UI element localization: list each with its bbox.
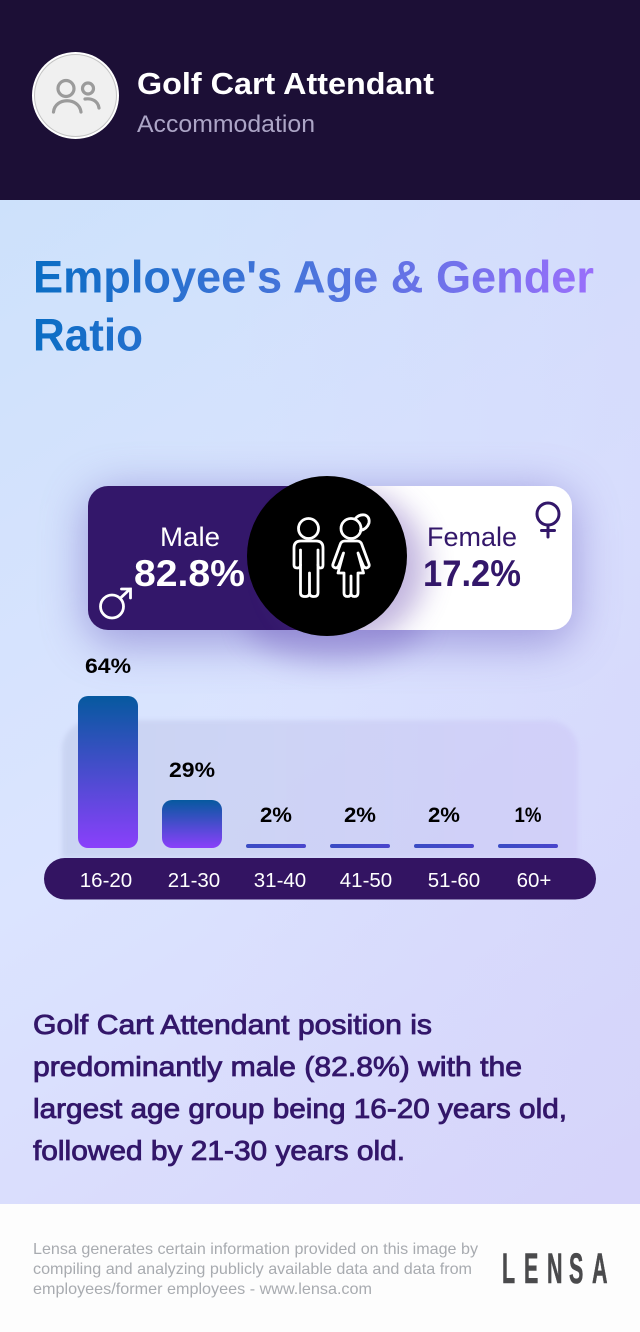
age axis pill bbox=[44, 858, 596, 900]
summary text: largest age group being 16-20 years old, bbox=[33, 1093, 567, 1124]
age axis pill: 51-60 bbox=[428, 869, 480, 892]
male label: Male bbox=[160, 522, 220, 552]
age axis pill: 60+ bbox=[517, 869, 551, 892]
icon: boy bbox=[294, 518, 323, 596]
panel: age chart bbox=[44, 655, 596, 900]
job title: Golf Cart Attendant bbox=[137, 66, 434, 101]
center circle bbox=[247, 476, 407, 636]
age axis pill: 41-50 bbox=[340, 869, 392, 892]
disclaimer text: compiling and analyzing publicly available data and data from bbox=[33, 1261, 472, 1278]
bar: 21-30 bbox=[162, 759, 222, 848]
bar: 31-40 bbox=[246, 804, 306, 848]
male card bbox=[88, 486, 330, 630]
male percentage: 82.8% bbox=[134, 553, 245, 594]
bar: 31-40: 2% bbox=[260, 804, 292, 827]
bar: 21-30: 29% bbox=[169, 759, 215, 782]
bar: 60+ bbox=[498, 804, 558, 848]
industry subtitle: Accommodation bbox=[137, 111, 315, 138]
bar: 51-60: 2% bbox=[428, 804, 460, 827]
female label: Female bbox=[427, 522, 517, 552]
disclaimer text bbox=[33, 1241, 478, 1298]
female percentage: 17.2% bbox=[423, 553, 521, 594]
age axis pill: 21-30 bbox=[168, 869, 220, 892]
female card bbox=[358, 486, 572, 630]
bar: 16-20 bbox=[78, 655, 138, 848]
header band bbox=[0, 0, 640, 200]
bar: 16-20: 64% bbox=[85, 655, 131, 678]
age axis pill: 31-40 bbox=[254, 869, 306, 892]
heading: Employee's Age & Gender bbox=[33, 252, 594, 302]
bar: 60+: 1% bbox=[514, 804, 542, 827]
bar: 51-60 bbox=[414, 804, 474, 848]
summary text bbox=[33, 1009, 567, 1166]
summary text: Golf Cart Attendant position is bbox=[33, 1009, 432, 1040]
logo: LENSA bbox=[502, 1245, 608, 1293]
summary text: predominantly male (82.8%) with the bbox=[33, 1051, 522, 1082]
bar: 41-50 bbox=[330, 804, 390, 848]
heading bbox=[33, 252, 594, 360]
disclaimer text: employees/former employees - www.lensa.com bbox=[33, 1281, 372, 1298]
summary text: followed by 21-30 years old. bbox=[33, 1135, 405, 1166]
page background bbox=[0, 200, 640, 1204]
icon: girl bbox=[333, 515, 369, 596]
panel: gender ratio bbox=[85, 476, 575, 662]
bar: 41-50: 2% bbox=[344, 804, 376, 827]
icon: female symbol bbox=[537, 503, 559, 537]
age axis pill: 16-20 bbox=[80, 869, 132, 892]
icon: job avatar bbox=[32, 52, 119, 139]
disclaimer text: Lensa generates certain information provided on this image by bbox=[33, 1241, 478, 1258]
icon: male symbol bbox=[100, 589, 130, 618]
heading: Ratio bbox=[33, 310, 143, 360]
footer bbox=[0, 1204, 640, 1332]
